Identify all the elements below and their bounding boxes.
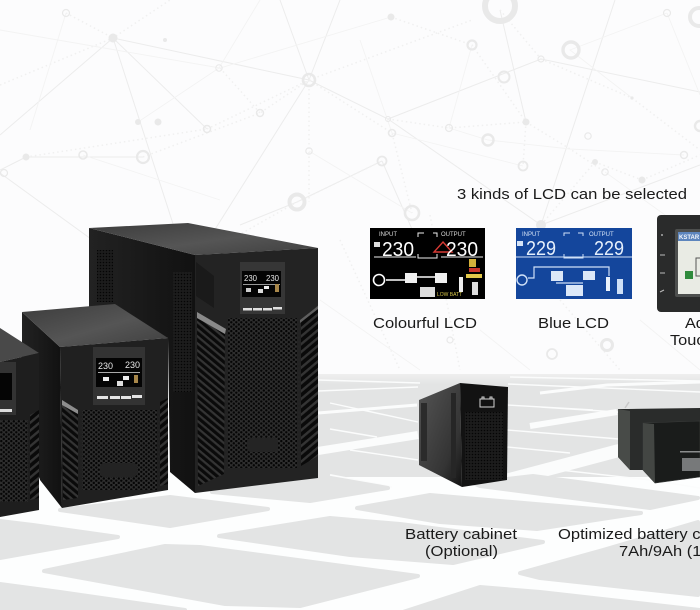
LCD: blue [516,228,632,299]
LCD: touch screen: KSTAR [679,235,700,241]
UPS large [89,223,318,493]
sealed batteries [618,402,700,483]
label: battery cabinet [405,526,518,560]
large UPS control panel [240,262,285,314]
LCD: colourful: OUTPUT [441,232,466,238]
UPS medium [22,304,168,508]
LCD: touch screen [657,215,700,312]
LCD: colourful: LOW BATT [437,292,462,298]
medium UPS control panel [93,347,145,405]
small UPS LCD [0,373,12,400]
label: battery cabinet: (Optional) [425,543,498,560]
label: touch LCD [670,315,700,349]
LCD: colourful: 230 [382,239,414,261]
large UPS control panel: 230 [244,274,258,283]
LCD: blue: INPUT [522,232,540,238]
UPS small, left [0,328,39,517]
label: optimized battery [558,526,700,560]
LCD: colourful: INPUT [379,232,397,238]
label: blue LCD: Blue LCD [538,315,609,332]
medium UPS control panel: 230 [98,361,113,371]
label: colourful LCD: Colourful LCD [373,315,477,332]
large UPS control panel: 230 [266,274,280,283]
icon: battery symbol [480,397,494,407]
background: network pattern [0,0,700,375]
LCD: colourful [370,228,485,299]
LCD: blue: 229 [594,238,624,260]
LCD: colourful: 230 [446,239,478,261]
medium UPS control panel: 230 [125,360,140,370]
battery cabinet [419,383,508,487]
heading: LCD options: 3 kinds of LCD can be selected [457,187,687,203]
LCD: blue: 229 [526,238,556,260]
label: battery cabinet: Battery cabinet [405,526,518,543]
LCD: blue: OUTPUT [589,232,614,238]
background: perspective floor [0,374,700,610]
